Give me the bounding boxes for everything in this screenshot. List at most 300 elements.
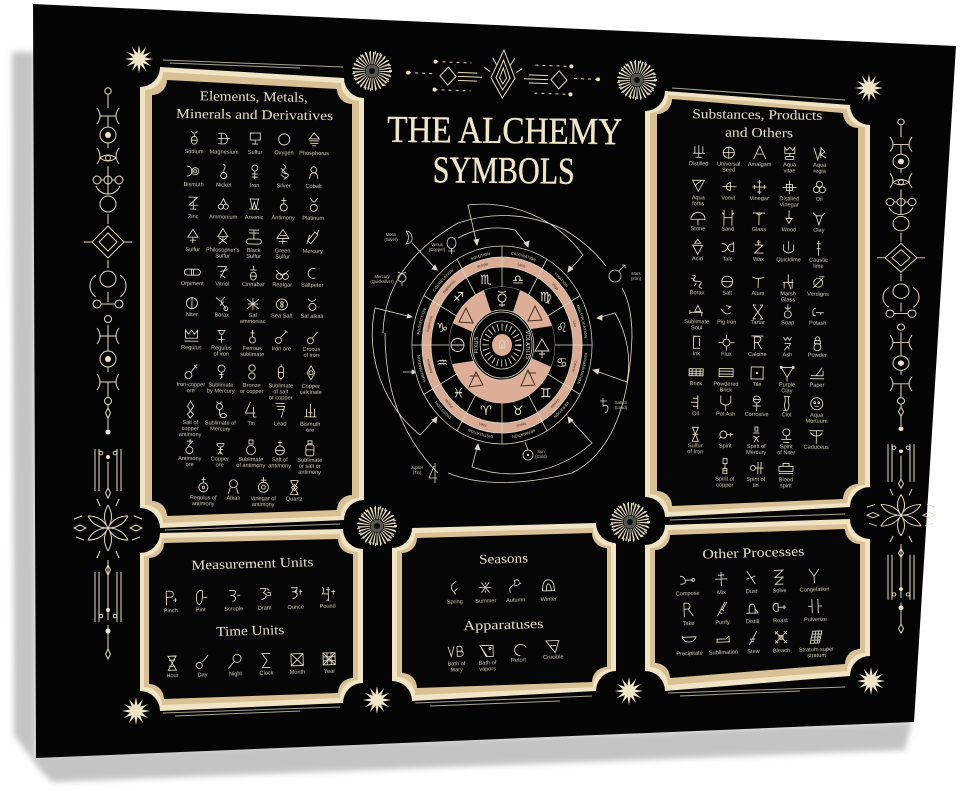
icon: philosophers sulfur: Sulfur <box>215 253 230 260</box>
icon: day: Day <box>197 672 208 678</box>
icon: sublimate of salt or antimony: antimony <box>298 470 321 476</box>
icon: bleach: Bleach <box>773 648 790 654</box>
zodiac glyphs: ♌ <box>556 321 568 336</box>
icon: take <box>682 603 695 627</box>
icon: sublimate of mercury <box>205 401 237 433</box>
icon: vitriol: Vitriol <box>215 281 229 288</box>
icon: distilled <box>689 145 709 167</box>
icon: powdered brick: Powdered <box>713 381 739 388</box>
icon: night <box>228 654 243 678</box>
planet: moon: (Silver) <box>384 237 398 242</box>
icon: iron copper ore <box>176 364 206 394</box>
icon: congelation <box>799 569 830 594</box>
icon: roast: Roast <box>773 618 788 624</box>
icon: dram <box>257 588 272 612</box>
icon: universal seed: Universal <box>717 162 740 168</box>
icon: flux <box>718 335 735 358</box>
icon: pulverize: Pulverize <box>804 617 827 623</box>
icon: spirit of niter: of Niter <box>777 450 795 456</box>
icon: sea salt <box>271 299 293 320</box>
icon: bath of vapors: Bath of <box>479 660 496 667</box>
icon: bismuth: Bismuth <box>183 182 204 188</box>
icon: blood spirit <box>779 463 793 489</box>
icon: regulus of iron: of iron <box>213 351 229 358</box>
icon: oil <box>813 181 825 203</box>
zodiac sign names on pink ring: Libra <box>518 262 525 268</box>
icon: aqua mortuum: Mortuum <box>805 419 828 425</box>
sunburst: bottom left star <box>118 693 154 729</box>
icon: talc: Talc <box>722 257 733 263</box>
icon: solve: Solve <box>772 588 787 594</box>
icon: blood spirit: Blood <box>779 477 793 483</box>
zodiac glyphs: ♊ <box>540 386 552 402</box>
icon: pound: Pound <box>319 604 336 610</box>
icon: clot <box>782 396 792 418</box>
icon: marsh glass: Glass <box>781 297 795 303</box>
sunburst: bottom center left star <box>357 680 397 720</box>
zodiac glyphs: ♈ <box>480 404 492 419</box>
icon: magnesium <box>210 133 239 156</box>
icon: take: Take <box>683 621 695 627</box>
heading: other processes: Other Processes <box>702 543 805 562</box>
icon: realgar: Realgar <box>272 282 292 289</box>
planet: mercury: Mercury <box>374 274 390 279</box>
thin decorative lines <box>163 60 845 716</box>
icon: caustic lime: Caustic <box>809 258 828 264</box>
planet: moon <box>384 231 412 244</box>
process labels on outer ring: DIGESTION <box>435 401 451 419</box>
icon: distilled vinegar: Vinegar <box>780 202 799 209</box>
icon: sublimate of salt or copper: or copper <box>269 395 293 402</box>
icon: antimony ore: Antimony <box>178 456 201 462</box>
icon: ferrous: Ferrous <box>243 346 262 352</box>
icon: corrosive: Corrosive <box>745 412 769 418</box>
icon: tin: Tin <box>247 421 255 427</box>
icon: spring: Spring <box>447 599 463 606</box>
panel: elements, metals, minerals and derivatives <box>140 67 364 528</box>
title: SYMBOLS <box>433 149 575 193</box>
icon: calcine <box>748 336 767 358</box>
icon: copper calcinate <box>300 366 322 396</box>
outer connector arcs and arrows <box>372 204 632 482</box>
icon: aqua vitae <box>783 147 797 174</box>
icon: sublimation <box>708 636 738 656</box>
icon: stew <box>747 631 761 655</box>
icon: glass <box>752 213 766 233</box>
heading: time units: Time Units <box>216 622 284 639</box>
icon: tile: Tile <box>753 382 761 388</box>
icon: salt of copper antimony: Salt of <box>182 420 198 426</box>
process labels on outer ring: SOLUTION <box>470 252 490 260</box>
icon: alum <box>752 277 765 297</box>
icon: nickel: Nickel <box>216 182 231 189</box>
icon: talc <box>721 242 734 263</box>
icon: scruple: Scruple <box>224 606 243 613</box>
icon: sulfur triangle: Sulfur <box>185 247 200 253</box>
icon: crucible: Crucible <box>543 654 564 661</box>
icon: acid: Acid <box>692 256 703 262</box>
icon: flux: Flux <box>721 352 732 358</box>
icon: congelation: Congelation <box>800 587 830 594</box>
icon: purple clay: Clay <box>781 388 793 394</box>
icon: black sulfur <box>246 230 261 260</box>
icon: aqua vitae: vitae <box>784 168 796 174</box>
heading: measurement units: Measurement Units <box>191 554 314 573</box>
icon: saltpeter: Saltpeter <box>301 283 324 289</box>
icon: green sulfur <box>275 229 291 261</box>
icon: sublimate of mercury: Sublimate of <box>205 420 236 427</box>
icon: sublimate by mercury: by Mercury <box>207 388 235 395</box>
zodiac sign names on pink ring: Leo <box>573 320 576 327</box>
icon: iron: Iron <box>250 183 259 189</box>
left side ornament column <box>74 88 142 659</box>
zodiac sign names on pink ring: Pisces <box>445 399 453 408</box>
icon: salt: Salt <box>722 291 732 297</box>
icon: antimony: Antimony <box>271 215 295 222</box>
icon: tartar: Tartar <box>751 320 765 326</box>
icon: paper: Paper <box>809 383 825 389</box>
icon: tin <box>245 402 257 427</box>
icon: vomit: Vomit <box>721 196 736 202</box>
icon: spirit of copper <box>715 459 735 489</box>
planet: mars: (Iron) <box>631 276 642 281</box>
process labels on outer ring: FIXATION <box>554 272 568 288</box>
icon: bronze or copper <box>240 365 264 395</box>
planet: mercury <box>370 272 406 286</box>
icon: platinum: Platinum <box>302 216 324 222</box>
icon: quicklime <box>776 241 801 264</box>
icon: sublimate by mercury: Sublimate <box>208 382 233 389</box>
icon: green sulfur: Sulfur <box>275 254 290 261</box>
icon: purple clay: Purple <box>779 382 795 388</box>
icon: green sulfur: Green <box>275 248 290 255</box>
icon: sublimate of salt or antimony: or salt or <box>299 464 321 470</box>
icon: copper calcinate: Copper <box>302 384 320 390</box>
icon: pinch <box>163 591 178 614</box>
zodiac sign names on pink ring: Gemini <box>550 399 560 408</box>
icon: regulus <box>181 330 202 351</box>
zodiac sign names on pink ring: Cancer <box>572 360 577 372</box>
icon: precipitate <box>676 636 703 657</box>
icon: mix <box>715 572 728 596</box>
panel: seasons and apparatuses <box>392 523 616 701</box>
title: THE ALCHEMY <box>387 109 622 153</box>
icon: ink <box>693 336 701 357</box>
icon: sal alkali <box>301 299 323 320</box>
icon: antimony ore <box>178 439 202 468</box>
icon: oil comb: Oil <box>692 411 699 417</box>
icon: wax: Wax <box>753 257 764 263</box>
icon: distill <box>745 604 759 625</box>
icon: niter: Niter <box>186 312 198 318</box>
icon: sublimate of mercury: Mercury <box>210 426 231 433</box>
icon: pint: Pint <box>196 607 206 614</box>
icon: aqua regia: Aqua <box>813 163 826 169</box>
icon: sal ammoniac <box>240 298 266 325</box>
planet: sun <box>523 449 547 460</box>
icon: quartz: Quartz <box>286 496 303 503</box>
icon: black sulfur: Black <box>247 248 261 254</box>
icon: sublimate of salt or antimony <box>297 441 322 476</box>
heading: substances: Substances, Products <box>692 106 822 123</box>
icon: quicklime: Quicklime <box>776 257 801 264</box>
icon: borax <box>214 296 230 319</box>
icon: caustic lime <box>809 241 828 270</box>
planet: venus: (Copper) <box>429 247 446 252</box>
icon: pot ash: Pot Ash <box>716 412 735 418</box>
icon: borax serpent: Borax <box>690 290 705 296</box>
icon: bronze or copper: or copper <box>240 389 264 395</box>
icon: ferrous: sublimate <box>240 352 264 358</box>
icon: stone: Stone <box>691 226 705 232</box>
icon: vinegar <box>750 180 769 202</box>
icon: salt of copper antimony: antimony <box>179 432 202 438</box>
icon: sublimate soul: Sublimate <box>684 319 709 325</box>
process labels on outer ring: SUBLIMATION <box>417 355 426 382</box>
icon: month sigma <box>259 653 274 677</box>
icon: mercury: Mercury <box>303 249 323 255</box>
icon: stratum super stratum: stratum <box>807 653 826 659</box>
icon: powder: Powder <box>808 353 827 359</box>
icon: caduceus: Caduceus <box>804 445 829 451</box>
icon: philosophers sulfur: Philosopher's <box>206 247 239 254</box>
icon: sublimate of antimony: of antimony <box>236 463 265 469</box>
heading: and others: and Others <box>725 125 793 140</box>
planet: sun: Sun <box>537 449 545 454</box>
chart: alchemy wheel <box>370 204 642 483</box>
icon: spirit of tin: tin <box>753 483 759 489</box>
icon: bismuth <box>183 166 204 188</box>
icon: crocus of iron <box>302 332 321 359</box>
icon: vinegar of antimony: Vinegar of <box>250 496 276 502</box>
icon: regulus of iron: Regulus <box>211 345 232 352</box>
icon: spirit <box>719 431 733 450</box>
icon: sand <box>721 210 735 233</box>
icon: sulfur of iron: Sulfur <box>688 443 703 449</box>
icon: sublimate of salt or copper <box>268 364 294 402</box>
icon: sulfur triangle <box>185 229 200 253</box>
icon: alkali: Alkali <box>226 496 240 502</box>
icon: verdigris <box>807 277 829 298</box>
zodiac sign names on pink ring: Aquarius <box>427 359 432 373</box>
zodiac sign names on pink ring: Aries <box>478 422 486 427</box>
icon: distilled: Distilled <box>689 161 708 167</box>
zodiac glyphs: ♎ <box>512 273 524 288</box>
icon: copper ore: Copper <box>211 456 229 463</box>
icon: verdigris: Verdigris <box>807 292 829 298</box>
icon: tile <box>751 367 763 388</box>
icon: pot ash <box>716 396 735 418</box>
icon: aqua fortis: Aqua <box>692 195 705 201</box>
heading: seasons: Seasons <box>479 550 528 567</box>
inner disc labels <box>474 331 530 360</box>
process labels on outer ring: CONGELATION <box>433 269 454 292</box>
icon: salt of antimony <box>268 440 292 470</box>
icon: summer: Summer <box>475 598 497 605</box>
icon: iron copper ore: Iron-copper <box>176 382 205 388</box>
icon: pound <box>319 587 336 610</box>
icon: ferrous <box>240 330 265 358</box>
icon: spirit of tin: Spirit of <box>746 477 765 483</box>
process labels on outer ring: PROJECTION <box>417 308 426 334</box>
icon: amalgam: Amalgam <box>748 162 772 168</box>
icon: phosphorus <box>299 133 329 157</box>
title <box>387 109 622 193</box>
icon: aqua vitae: Aqua <box>783 162 796 168</box>
icon: clay: Clay <box>813 228 825 234</box>
heading: apparatuses: Apparatuses <box>463 616 544 633</box>
icon: sal ammoniac: Sal <box>249 313 257 319</box>
zodiac glyphs: ♐ <box>452 290 464 306</box>
icon: ammonium <box>209 198 238 221</box>
zodiac glyphs <box>436 273 568 419</box>
sunburst: middle left eye <box>351 500 403 552</box>
icon: sublimate of salt or copper: Sublimate <box>268 383 293 390</box>
icon: sea salt: Sea Salt <box>271 313 293 320</box>
process labels on outer ring: CERATION <box>554 402 568 418</box>
planet: saturn: Saturn <box>615 400 627 405</box>
icon: wax <box>753 240 764 263</box>
icon: bismuth ore: Bismuth <box>300 422 320 428</box>
icon: dram: Dram <box>258 605 272 612</box>
icon: powdered brick: Brick <box>720 388 732 394</box>
icon: sublimate of salt or copper: of salt <box>273 389 289 396</box>
planet: sun: (Gold) <box>535 454 547 459</box>
icon: mix: Mix <box>717 590 726 596</box>
wheel rings and segments <box>412 246 592 444</box>
icon: hour <box>166 656 179 679</box>
icon: spirit of mercury: Spirit of <box>747 444 766 450</box>
icon: aqua regia <box>813 148 827 175</box>
process labels on outer ring: CALCINATION <box>511 252 536 262</box>
icon: brick <box>689 369 703 387</box>
icon: ink: Ink <box>693 351 700 357</box>
icon: marsh glass: Marsh <box>780 291 796 297</box>
panel: substances, products and others <box>645 91 870 517</box>
icon: bismuth ore: ore <box>306 428 314 434</box>
heading: elements: Elements, Metals, <box>200 88 308 105</box>
icon: spirit of mercury <box>746 427 767 456</box>
icon: philosophers sulfur <box>206 228 240 260</box>
icon: powdered brick <box>713 368 739 394</box>
icon: distill: Distill <box>746 619 759 625</box>
icon: sulfur of iron <box>687 427 703 455</box>
icon: ammonium: Ammonium <box>209 214 238 221</box>
icon: copper ore <box>210 443 229 469</box>
icon: salt of antimony: antimony <box>268 463 291 470</box>
icon: solve <box>772 570 787 594</box>
icon: zinc: Zinc <box>188 214 199 220</box>
icon: precipitate: Precipitate <box>676 651 703 657</box>
icon: copper calcinate: calcinate <box>300 390 322 396</box>
icon: sulfur: Sulfur <box>248 150 263 156</box>
zodiac sign names on pink ring <box>426 262 577 427</box>
icon: oxygen: Oxygen <box>274 150 294 157</box>
zodiac glyphs: ♓ <box>452 386 464 402</box>
icon: cinnabar <box>242 266 265 288</box>
sunburst: top right star <box>848 67 890 109</box>
icon: month sigma: Clock <box>259 670 274 677</box>
icon: sulfur of iron: of Iron <box>687 449 703 455</box>
icon: salt <box>722 276 733 297</box>
zodiac glyphs: ♉ <box>512 404 524 419</box>
icon: compose: Compose <box>676 591 700 597</box>
planet: mars: Mars <box>631 271 641 276</box>
icon: dust: Dust <box>746 589 758 595</box>
icon: realgar <box>272 270 292 289</box>
icon: day <box>196 655 209 679</box>
icon: corrosive <box>745 396 769 418</box>
icon: silver: Silver <box>277 183 291 190</box>
icon: wood: Wood <box>782 227 796 233</box>
icon: wood <box>782 210 796 233</box>
icon: cobalt <box>305 167 322 190</box>
icon: orpiment: Orpiment <box>181 281 204 287</box>
element symbols on inner ring <box>451 291 549 387</box>
icon: vomit <box>721 183 736 202</box>
icon: marsh glass <box>780 274 796 303</box>
icon: pinch: Pinch <box>164 608 178 614</box>
planet: venus <box>429 237 456 254</box>
icon: oxygen <box>274 134 294 157</box>
icon: sal ammoniac: ammoniac <box>240 319 266 325</box>
planet: jupiter: (Tin) <box>413 470 422 475</box>
icon: retort: Retort <box>511 657 527 664</box>
icon: alkali <box>226 480 240 502</box>
sunburst: top center left eye <box>351 50 393 92</box>
icon: blood spirit: spirit <box>780 483 792 489</box>
icon: oil: Oil <box>816 197 823 203</box>
icon: caustic lime: lime <box>813 264 824 270</box>
icon: zinc <box>188 197 199 220</box>
icon: platinum <box>302 198 325 222</box>
process labels on outer ring: SEPARATION <box>512 429 536 438</box>
icon: autumn: Autumn <box>506 597 525 604</box>
icon: copper ore: ore <box>216 463 224 469</box>
icon: bath of mary <box>447 646 466 674</box>
icon: saltpeter <box>301 268 324 289</box>
icon: iron ore: Iron ore <box>272 346 291 353</box>
icon: spirit of tin <box>746 462 766 489</box>
zodiac sign names on pink ring: Taurus <box>516 422 527 427</box>
icon: alum: Alum <box>752 291 765 297</box>
icon: sublimate of antimony: Sublimate <box>238 457 263 463</box>
icon: iron copper ore: ore <box>187 388 195 394</box>
icon: vitriol <box>215 266 229 288</box>
icon: pig iron <box>717 306 737 326</box>
icon: regulus of antimony <box>190 477 217 508</box>
icon: potash <box>809 309 827 327</box>
icon: potash: Potash <box>809 321 826 327</box>
zodiac glyphs: ♒ <box>436 356 448 371</box>
zodiac sign names on pink ring: Sagittarius <box>442 280 456 294</box>
icon: spirit of copper: copper <box>716 483 733 489</box>
planet: moon: Moon <box>386 232 396 237</box>
top ornament <box>405 47 601 101</box>
icon: spirit of niter <box>777 429 796 456</box>
right side ornament column <box>867 119 935 633</box>
icon: month <box>289 653 305 676</box>
icon: purify <box>715 602 730 626</box>
icon: roast <box>773 603 788 624</box>
icon: spirit of niter: Spirit <box>780 444 793 450</box>
icon: purify: Purify <box>715 620 730 626</box>
icon: bronze or copper: Bronze <box>243 383 261 389</box>
icon: regulus of antimony: antimony <box>192 501 215 507</box>
icon: winter: Winter <box>541 597 557 603</box>
icon: ounce <box>287 587 304 611</box>
icon: phosphorus: Phosphorus <box>299 151 329 157</box>
